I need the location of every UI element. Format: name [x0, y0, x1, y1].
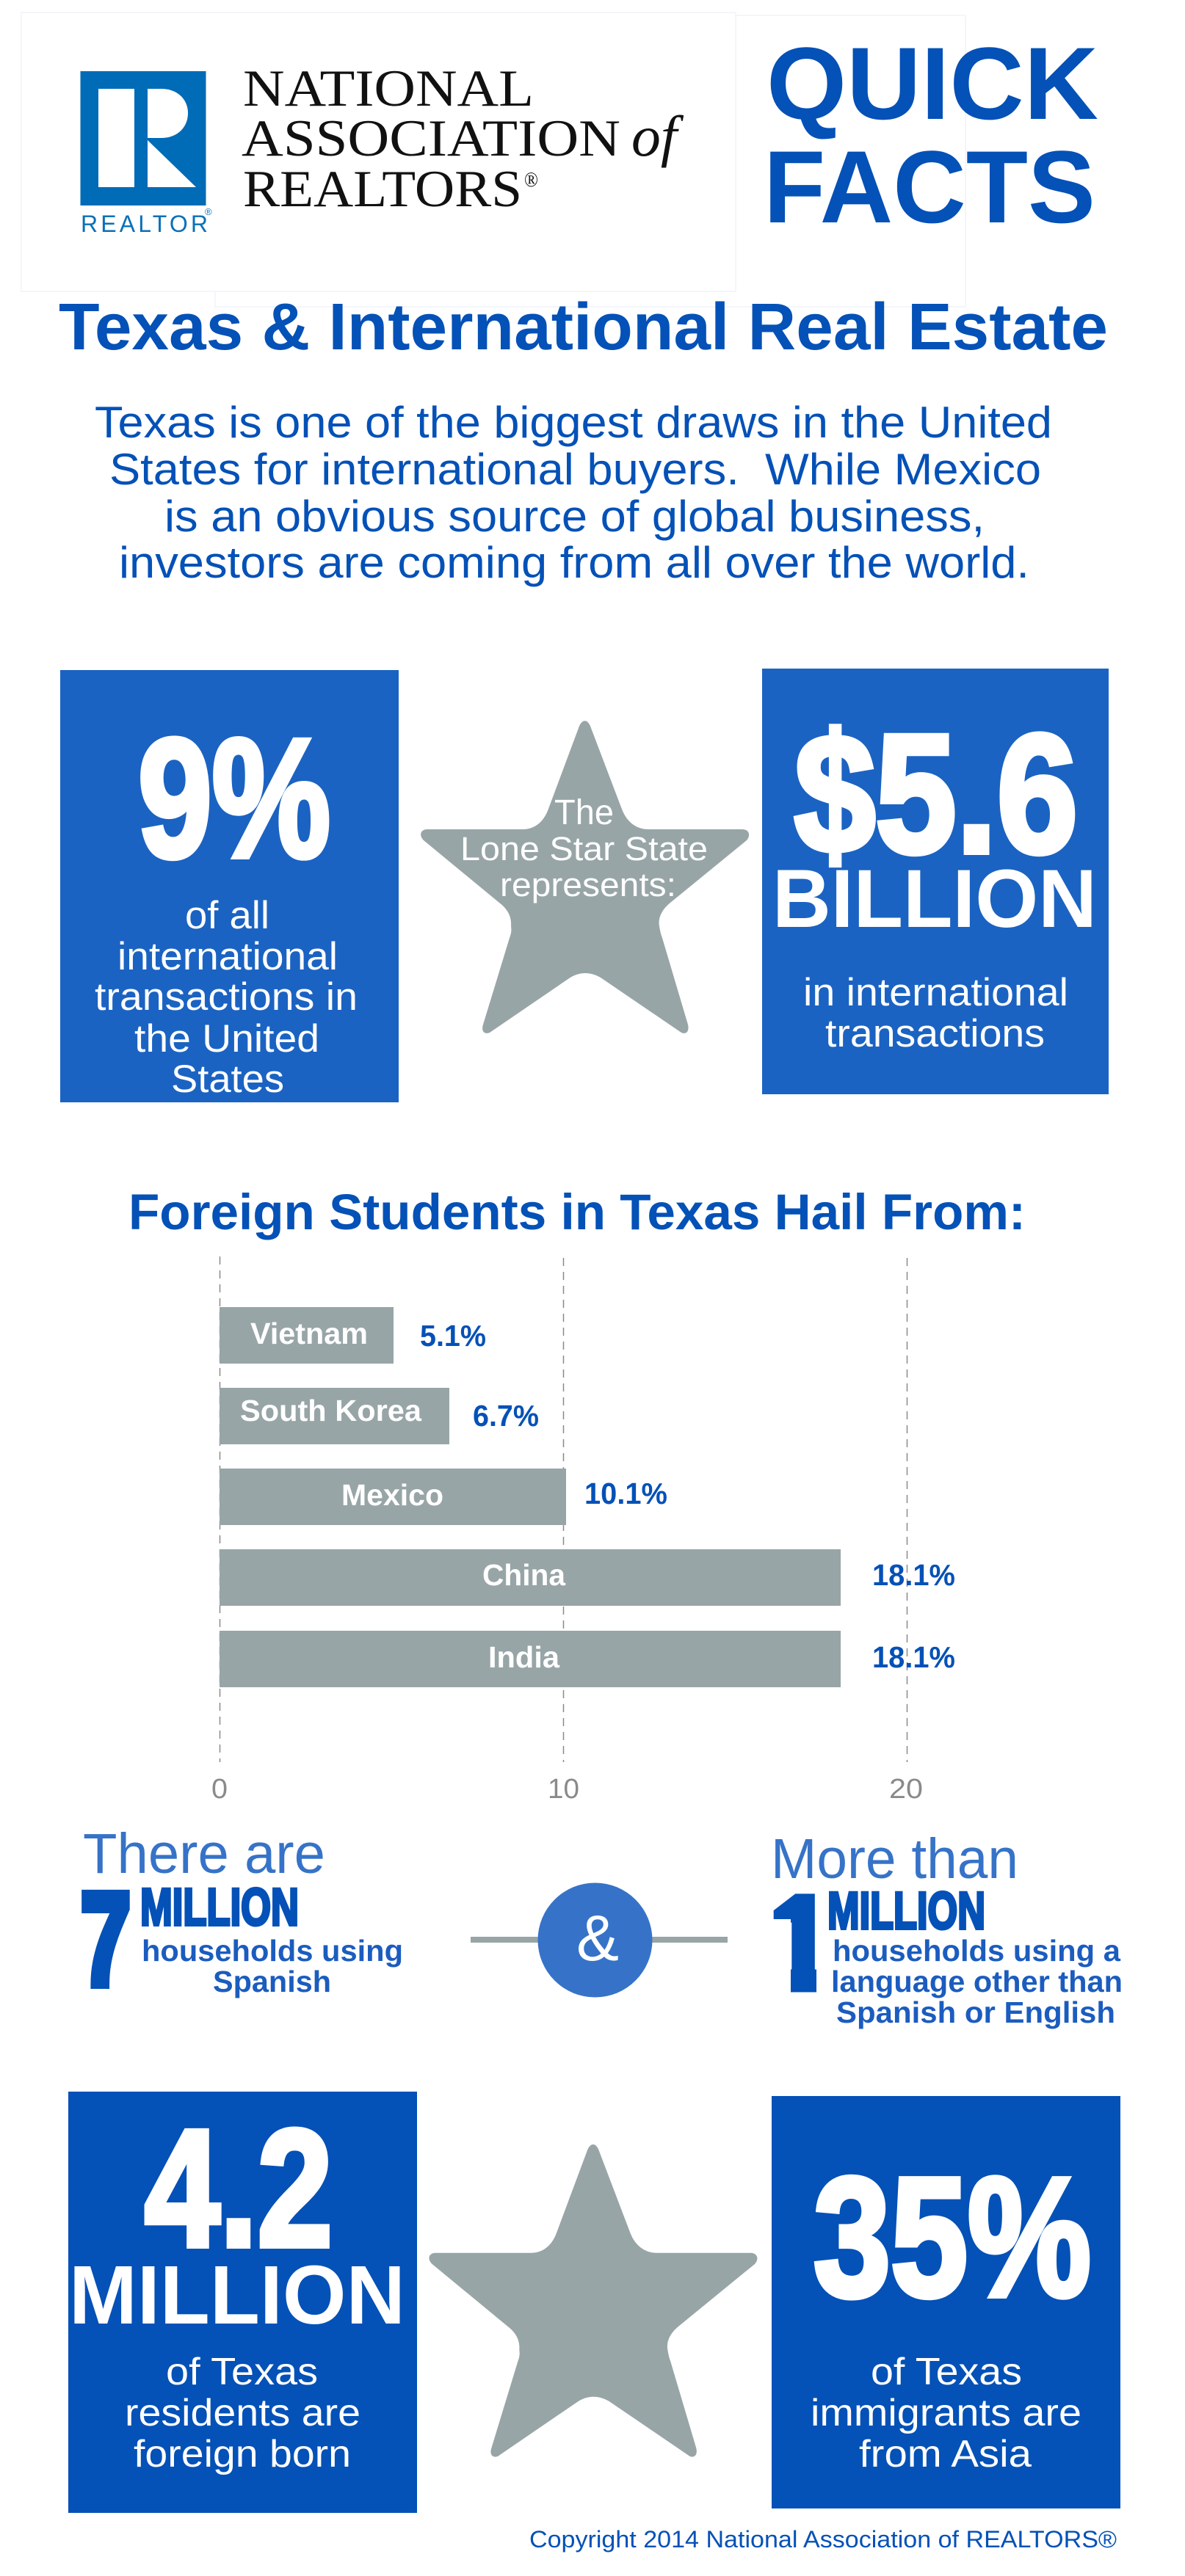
star: The Lone Star State represents — [421, 721, 749, 1033]
heading: Quick Facts — [764, 26, 1098, 244]
x axis tick labels — [211, 1774, 923, 1805]
bar: India: India — [488, 1640, 560, 1674]
icon: ampersand connector — [471, 1883, 728, 1998]
panel: 35% from Asia — [772, 2096, 1120, 2508]
x axis tick labels: 20 — [889, 1774, 923, 1805]
bar: South Korea: South Korea — [240, 1394, 422, 1427]
panel text: of all — [185, 894, 269, 937]
icon: Realtor R block — [81, 71, 206, 205]
callout: 1 million households: language other than — [831, 1965, 1123, 1998]
stat: 9%: 9% — [138, 704, 330, 892]
panel: $5.6 billion — [762, 669, 1109, 1094]
stat unit: BILLION: BILLION — [772, 853, 1097, 945]
panel text: in international — [803, 971, 1068, 1014]
bar: Mexico: Mexico — [341, 1478, 443, 1512]
bar: India: 18.1% — [872, 1640, 955, 1674]
star text: Lone Star State — [460, 830, 708, 867]
stat unit: MILLION: MILLION — [69, 2249, 405, 2341]
panel text: immigrants are — [811, 2392, 1081, 2434]
panel text: transactions — [825, 1012, 1045, 1055]
panel text: of Texas — [166, 2351, 318, 2393]
logo wordmark: NATIONAL — [243, 60, 534, 117]
panel text: States — [171, 1058, 284, 1101]
callout: 7 million households — [81, 1822, 403, 2012]
logo wordmark: ® — [524, 169, 538, 192]
heading: Quick Facts: QUICK — [767, 26, 1098, 141]
logo wordmark — [242, 60, 684, 218]
intro text block: States for international buyers. While Mexico — [109, 445, 1041, 494]
bar: India — [220, 1631, 955, 1687]
copyright: Copyright 2014 National Association of REALTORS® — [529, 2526, 1117, 2553]
intro text block — [95, 398, 1052, 587]
stat: 35%: 35% — [813, 2142, 1091, 2332]
intro text block: Texas is one of the biggest draws in the United — [95, 398, 1052, 447]
logo wordmark: ASSOCIATION — [242, 110, 620, 167]
bar: China: China — [482, 1558, 566, 1592]
x axis tick labels: 10 — [548, 1774, 579, 1805]
panel text: from Asia — [859, 2433, 1032, 2475]
callout: 1 million households: More than — [771, 1827, 1018, 1891]
bar: Vietnam: Vietnam — [250, 1317, 368, 1350]
intro text block: is an obvious source of global business, — [164, 492, 985, 541]
panel: 9% of international transactions — [60, 670, 399, 1102]
heading: Quick Facts: FACTS — [764, 129, 1095, 244]
bar: South Korea: 6.7% — [473, 1399, 539, 1433]
callout: 1 million households — [770, 1827, 1123, 2029]
callout: 7 million households: Spanish — [213, 1965, 331, 1998]
stat: 4.2: 4.2 — [145, 2096, 333, 2282]
logo wordmark: REALTORS — [243, 161, 522, 218]
heading: foreign students: Foreign Students in Texas Hail From: — [128, 1184, 1026, 1240]
star text — [460, 793, 708, 903]
callout: 1 million households: MILLION — [827, 1882, 985, 1940]
panel text: foreign born — [134, 2433, 351, 2475]
panel text — [95, 894, 358, 1101]
bar: Vietnam: 5.1% — [420, 1319, 486, 1353]
title: Texas & International Real Estate — [59, 291, 1108, 364]
logo wordmark: of — [631, 104, 684, 168]
callout: 7 million households: There are — [83, 1822, 325, 1885]
star text: The — [554, 793, 614, 832]
panel text — [811, 2351, 1081, 2475]
bar: China: 18.1% — [872, 1558, 955, 1592]
callout: 1 million households: households using a — [833, 1934, 1121, 1968]
panel text: residents are — [125, 2392, 360, 2434]
panel text: international — [117, 935, 338, 978]
panel: 4.2 million foreign born — [68, 2092, 417, 2513]
bar: Mexico — [220, 1469, 667, 1525]
callout: 7 million households: MILLION — [140, 1879, 299, 1937]
icon: large star — [429, 2144, 757, 2457]
callout: 7 million households: households using — [142, 1934, 403, 1968]
stat: $5.6: $5.6 — [794, 699, 1078, 888]
panel text: transactions in — [95, 975, 358, 1019]
star text: represents: — [500, 866, 676, 903]
bar: China — [220, 1549, 955, 1606]
panel text — [803, 971, 1068, 1055]
callout: 1 million households: Spanish or English — [836, 1995, 1115, 2029]
logo: National Association of Realtors — [81, 60, 684, 237]
bar chart: foreign students — [211, 1256, 955, 1805]
panel text: of Texas — [871, 2351, 1022, 2393]
intro text block: investors are coming from all over the world. — [119, 538, 1029, 587]
callout: 1 million households: 1 — [770, 1871, 831, 2015]
icon: ampersand connector: & — [576, 1902, 619, 1974]
x axis tick labels: 0 — [211, 1774, 228, 1805]
bar: Mexico: 10.1% — [584, 1477, 667, 1510]
header background frames — [21, 12, 965, 307]
panel text: the United — [134, 1017, 319, 1060]
logo caption: REALTOR: ® — [205, 206, 212, 217]
logo caption: REALTOR: REALTOR — [81, 211, 208, 237]
bar: Vietnam — [220, 1307, 486, 1364]
panel text — [125, 2351, 360, 2475]
callout: 7 million households: 7 — [81, 1866, 131, 2012]
bar: South Korea — [220, 1388, 539, 1444]
